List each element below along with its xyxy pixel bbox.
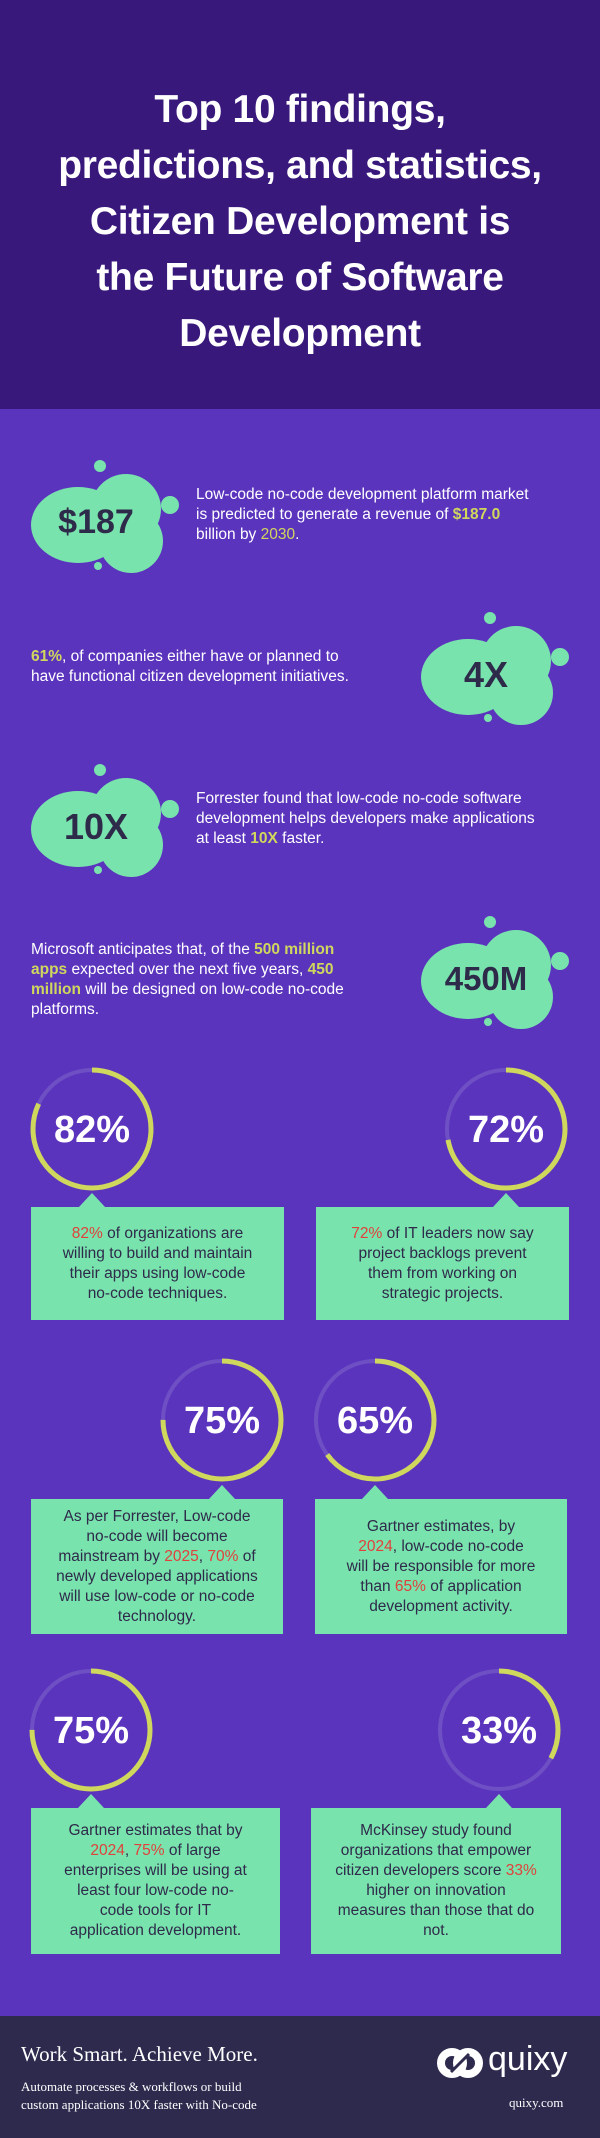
- title: predictions, and statistics,: [58, 144, 542, 187]
- stat text: $187: Low-code no-code development platform market: [196, 486, 529, 503]
- stat text: 10X: [196, 790, 535, 847]
- blob: $187: [31, 460, 179, 573]
- box: 65%: Gartner estimates, by: [367, 1518, 515, 1534]
- ring: 72%: [445, 1068, 568, 1190]
- box: 82%: their apps using low-code: [70, 1264, 245, 1282]
- ring: 33%: [438, 1668, 560, 1791]
- box: 82%: 82% of organizations are: [72, 1224, 243, 1242]
- box: 82%: willing to build and maintain: [63, 1244, 252, 1262]
- box: 75% Gartner: least four low-code no-: [77, 1882, 234, 1899]
- stat text: 450M: apps expected over the next five years, 450: [31, 961, 333, 978]
- box: 33%: [311, 1808, 561, 1954]
- blob: 10X: 10X: [64, 806, 128, 847]
- stat text: 10X: at least 10X faster.: [196, 830, 324, 847]
- logo: quixy: [437, 2040, 568, 2078]
- stat text: $187: is predicted to generate a revenue of $187.0: [196, 506, 500, 523]
- box: 65%: [315, 1499, 567, 1634]
- box: 75% Gartner: application development.: [70, 1922, 241, 1939]
- title: Development: [179, 312, 421, 355]
- box: 72%: 72% of IT leaders now say: [351, 1224, 534, 1242]
- box: 65%: will be responsible for more: [347, 1558, 535, 1574]
- box: 75% Gartner: code tools for IT: [100, 1902, 211, 1919]
- box: 82%: [31, 1207, 284, 1320]
- stat text: 61%: 61%, of companies either have or planned to: [31, 648, 339, 665]
- box: 75% Gartner: Gartner estimates that by: [68, 1822, 243, 1839]
- box: 33%: measures than those that do: [338, 1902, 534, 1919]
- stat text: $187: [196, 486, 529, 543]
- stat text: 450M: platforms.: [31, 1001, 99, 1018]
- blob: 4X: [421, 612, 569, 725]
- stat text: 450M: [31, 941, 344, 1018]
- box: 72%: [316, 1207, 569, 1320]
- title: Top 10 findings,: [154, 88, 446, 131]
- box: 65%: than 65% of application: [360, 1578, 522, 1594]
- title: the Future of Software: [96, 256, 504, 299]
- box: 75% Forrester: newly developed applications: [56, 1568, 258, 1584]
- box: 65%: development activity.: [369, 1598, 513, 1614]
- box: 82%: no-code techniques.: [88, 1284, 227, 1302]
- header panel: [0, 0, 600, 409]
- title: Citizen Development is: [90, 200, 510, 243]
- footer subtext: Automate processes & workflows or build: [21, 2079, 242, 2094]
- stat text: 61%: have functional citizen development initiatives.: [31, 668, 349, 685]
- ring: 72%: 72%: [468, 1109, 544, 1151]
- footer tagline: Work Smart. Achieve More.: [21, 2042, 258, 2066]
- box: 33%: higher on innovation: [366, 1882, 506, 1899]
- box: 75% Gartner: 2024, 75% of large: [90, 1842, 221, 1859]
- footer subtext: [21, 2079, 257, 2112]
- box: 33%: organizations that empower: [341, 1842, 531, 1859]
- stat text: $187: billion by 2030.: [196, 526, 299, 543]
- ring: 75%: [160, 1358, 284, 1482]
- ring: 33%: 33%: [461, 1710, 537, 1752]
- title: [58, 88, 542, 355]
- box: 33%: not.: [423, 1922, 449, 1939]
- ring: 65%: 65%: [337, 1400, 413, 1442]
- stat text: 450M: million will be designed on low-code no-code: [31, 981, 344, 998]
- ring: 75%: 75%: [184, 1400, 260, 1442]
- box: 72%: project backlogs prevent: [358, 1244, 526, 1262]
- footer: [0, 2016, 600, 2138]
- box: 75% Gartner: enterprises will be using at: [64, 1862, 247, 1879]
- logo: quixy: quixy: [488, 2040, 567, 2078]
- blob: 450M: 450M: [445, 960, 527, 997]
- ring: 65%: [314, 1358, 436, 1482]
- stat text: 61%: [31, 648, 349, 685]
- box: 33%: citizen developers score 33%: [335, 1862, 537, 1879]
- ring: 82%: [30, 1068, 154, 1190]
- box: 72%: strategic projects.: [382, 1284, 503, 1302]
- blob: 450M: [421, 916, 569, 1029]
- box: 75% Forrester: no-code will become: [86, 1528, 228, 1544]
- blob: 10X: [31, 764, 179, 877]
- box: 75% Forrester: [31, 1499, 283, 1634]
- box: 75% Forrester: will use low-code or no-code: [59, 1588, 255, 1604]
- box: 65%: 2024, low-code no-code: [358, 1538, 524, 1554]
- stat text: 10X: development helps developers make applications: [196, 810, 535, 827]
- box: 75% Gartner: [31, 1808, 280, 1954]
- box: 75% Forrester: As per Forrester, Low-code: [64, 1508, 250, 1524]
- footer url: quixy.com: [509, 2095, 563, 2110]
- box: 72%: them from working on: [368, 1264, 517, 1282]
- ring: 82%: 82%: [54, 1109, 130, 1151]
- blob: 4X: 4X: [464, 654, 508, 695]
- box: 75% Forrester: mainstream by 2025, 70% of: [58, 1548, 256, 1564]
- ring: 75% Gartner: 75%: [53, 1710, 129, 1752]
- stat text: 10X: Forrester found that low-code no-code software: [196, 790, 522, 807]
- blob: $187: $187: [58, 503, 134, 541]
- box: 33%: McKinsey study found: [360, 1822, 512, 1839]
- ring: 75% Gartner: [30, 1668, 152, 1792]
- box: 75% Forrester: technology.: [118, 1608, 196, 1624]
- footer subtext: custom applications 10X faster with No-code: [21, 2097, 257, 2112]
- stat text: 450M: Microsoft anticipates that, of the 500 million: [31, 941, 334, 958]
